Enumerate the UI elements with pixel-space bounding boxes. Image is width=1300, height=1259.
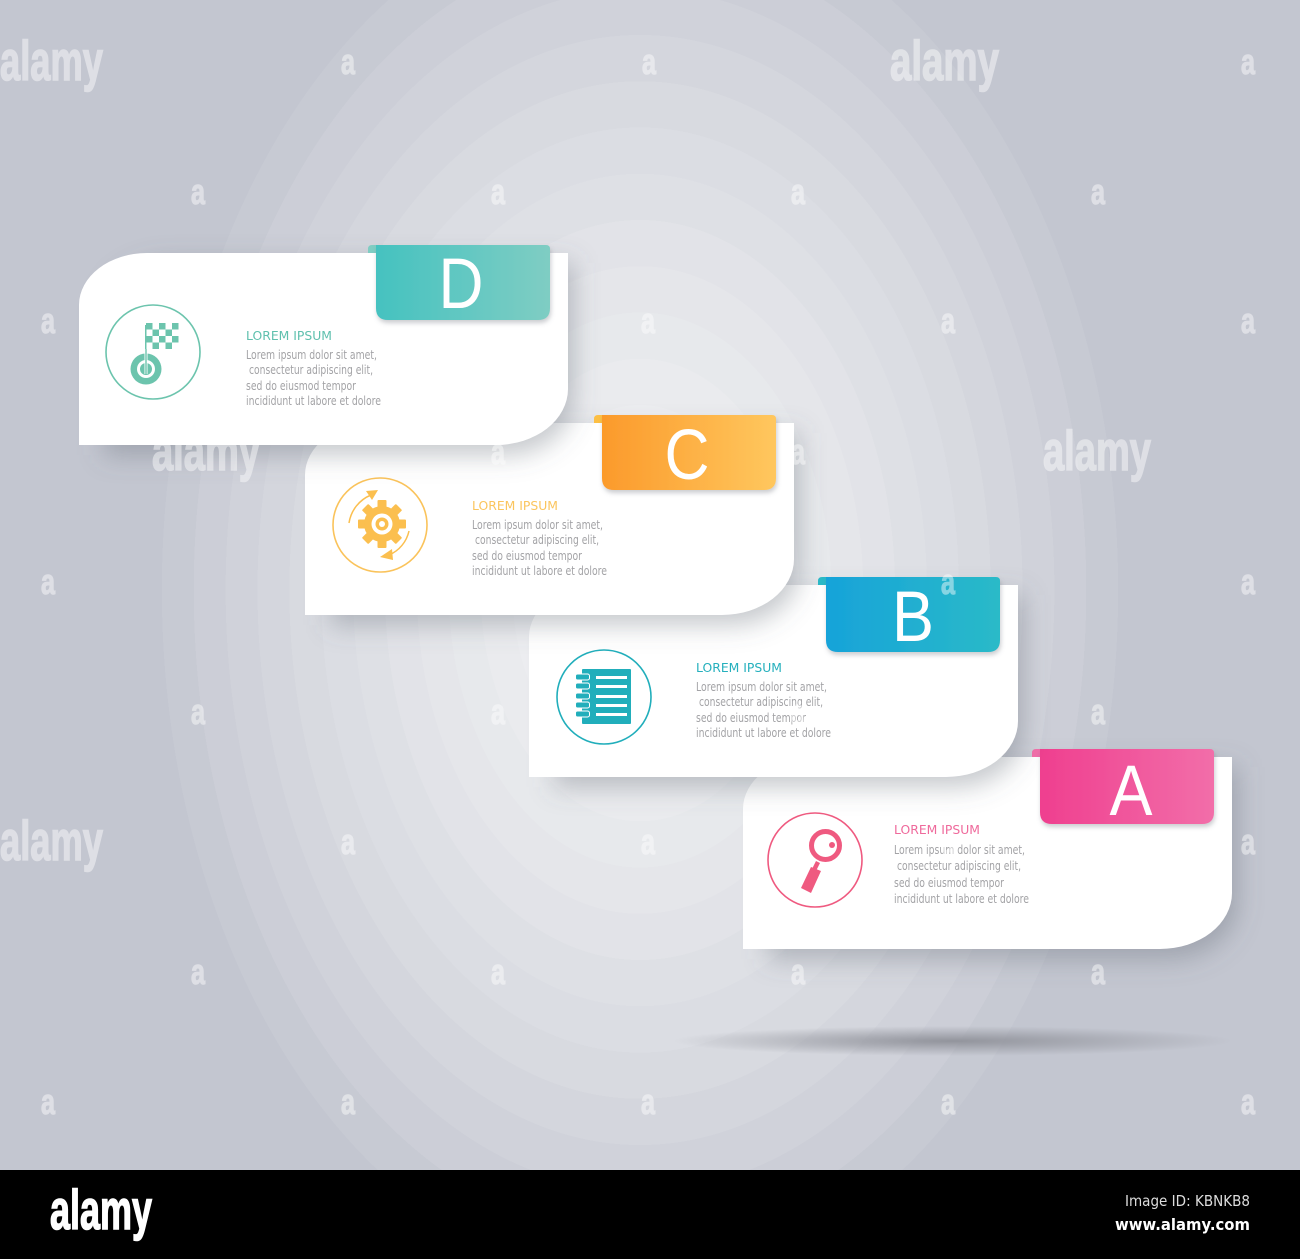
panel: step A: A [1110, 752, 1153, 831]
panel: step D: Lorem ipsum dolor sit amet, [246, 347, 377, 362]
footer bar: Image ID: KBNKB8 [1125, 1192, 1250, 1210]
watermarks: a [1091, 691, 1106, 732]
watermarks: alamy [0, 29, 103, 92]
panel: step C [305, 415, 799, 625]
watermarks: a [341, 1081, 356, 1122]
watermarks: a [941, 300, 956, 341]
panel: step A: incididunt ut labore et dolore [894, 891, 1029, 906]
panel: step B: consectetur adipiscing elit, [699, 694, 823, 709]
watermarks: a [341, 821, 356, 862]
ground shadow [673, 1026, 1233, 1056]
watermarks: a [791, 951, 806, 992]
footer bar: www.alamy.com [1115, 1215, 1250, 1234]
watermarks: a [1241, 41, 1256, 82]
watermarks: a [491, 431, 506, 472]
panel: step D: incididunt ut labore et dolore [246, 393, 381, 408]
panel: step C: C [664, 416, 710, 495]
panel: step D: D [438, 245, 484, 324]
panel: step A: LOREM IPSUM [894, 822, 980, 837]
watermarks: a [791, 171, 806, 212]
watermarks: a [191, 691, 206, 732]
panel: step B: Lorem ipsum dolor sit amet, [696, 679, 827, 694]
panel: step A: sed do eiusmod tempor [894, 875, 1005, 890]
footer bar: alamy [50, 1178, 152, 1241]
watermarks: a [642, 41, 657, 82]
watermarks: a [41, 561, 56, 602]
watermarks: a [941, 1081, 956, 1122]
panel: step C: sed do eiusmod tempor [472, 548, 583, 563]
watermarks: a [1091, 951, 1106, 992]
watermarks: a [941, 561, 956, 602]
watermarks: a [791, 431, 806, 472]
watermarks: a [1241, 561, 1256, 602]
panel: step D: sed do eiusmod tempor [246, 378, 357, 393]
panel: step B: B [892, 578, 934, 657]
panel: step A: Lorem ipsum dolor sit amet, [894, 842, 1025, 857]
watermarks: a [1091, 171, 1106, 212]
watermarks: alamy [890, 29, 999, 92]
watermarks: alamy [152, 419, 260, 482]
watermarks: a [791, 691, 806, 732]
panel: step C: consectetur adipiscing elit, [475, 532, 599, 547]
panel: step D [79, 245, 573, 455]
watermarks: alamy [0, 809, 103, 872]
panel: step B: incididunt ut labore et dolore [696, 725, 831, 740]
watermarks: a [1241, 1081, 1256, 1122]
watermarks: a [491, 171, 506, 212]
watermarks: a [641, 300, 656, 341]
panel: step C: Lorem ipsum dolor sit amet, [472, 517, 603, 532]
panel: step C: incididunt ut labore et dolore [472, 563, 607, 578]
panel: step B: LOREM IPSUM [696, 660, 782, 675]
watermarks: a [41, 1081, 56, 1122]
watermarks: a [191, 951, 206, 992]
watermarks: a [941, 821, 956, 862]
watermarks: alamy [1043, 419, 1151, 482]
footer bar [0, 1170, 1300, 1259]
watermarks: a [1241, 300, 1256, 341]
panel: step D: LOREM IPSUM [246, 328, 332, 343]
watermarks: a [1241, 821, 1256, 862]
watermarks: a [41, 300, 56, 341]
watermarks: a [491, 951, 506, 992]
watermarks: a [641, 821, 656, 862]
panel: step D: consectetur adipiscing elit, [249, 362, 373, 377]
panel: step C: LOREM IPSUM [472, 498, 558, 513]
panel: step B: sed do eiusmod tempor [696, 710, 807, 725]
panel: step A: consectetur adipiscing elit, [897, 858, 1021, 873]
panel: step B [529, 577, 1023, 787]
watermarks: a [341, 41, 356, 82]
watermarks: a [641, 1081, 656, 1122]
watermarks: a [491, 691, 506, 732]
panel: step A [743, 749, 1237, 959]
watermarks: a [191, 171, 206, 212]
